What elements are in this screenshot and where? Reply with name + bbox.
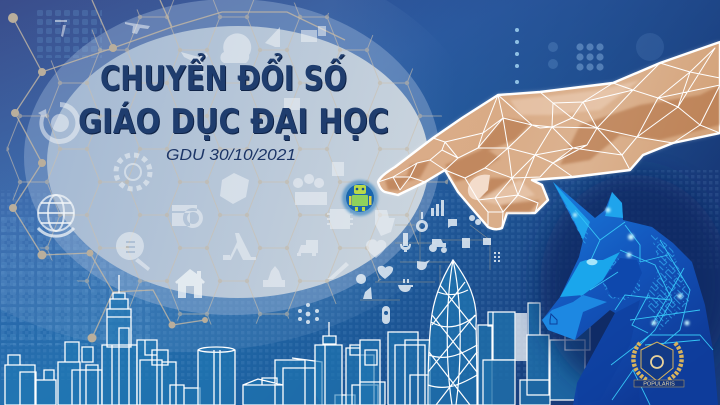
unicorn nostril [550, 314, 557, 324]
icon: coin stack [382, 306, 390, 324]
icon: heart pulse [366, 239, 386, 258]
hex lines: lower right network [360, 210, 490, 300]
unicorn face highlight [560, 252, 620, 297]
icon: small charts [284, 98, 344, 176]
icon: house [175, 269, 205, 298]
icons: technology symbols [38, 20, 395, 298]
shadow behind unicorn [540, 175, 720, 395]
icon: chip [327, 209, 353, 229]
hand back highlight [478, 80, 640, 205]
hand silhouette [378, 42, 720, 229]
icons: lower right small symbols [298, 200, 500, 324]
icon: tractor [429, 239, 447, 253]
center blocks [243, 358, 355, 405]
logo name: POPULARIS [643, 382, 675, 388]
icon: paper plane [265, 27, 280, 47]
icon: bird [417, 260, 430, 270]
unicorn cheek panel [603, 258, 642, 297]
logo shield [641, 342, 673, 381]
icon: robot badge [342, 180, 378, 216]
left city blocks [5, 342, 102, 405]
icon: app store [223, 233, 256, 260]
logo banner [634, 380, 684, 387]
icon: paw [469, 215, 481, 225]
subtitle: date: GDU 30/10/2021 [166, 147, 296, 164]
unicorn silhouette [542, 182, 718, 405]
icon: cloud and sun [220, 33, 251, 63]
icon: message box [483, 238, 491, 245]
hand shading [385, 80, 720, 212]
midtown blocks [137, 340, 200, 405]
icon: chat [448, 219, 457, 228]
icon: camera [301, 26, 326, 42]
unicorn dark neck panels [577, 300, 718, 405]
icon: magnifier [116, 232, 150, 271]
oval panel: outer translucent ring [0, 0, 485, 352]
icon: weight [263, 266, 285, 287]
icon: dollar coin [416, 212, 428, 232]
title: CHUYỂN ĐỔI SỐ [100, 52, 347, 99]
icon: money box [172, 205, 203, 228]
thumb nail highlight [468, 175, 490, 200]
hand with polygon mesh [378, 42, 720, 229]
icon: network node star [298, 303, 319, 324]
icon: bar chart [431, 200, 444, 216]
round tower [198, 347, 235, 405]
hand mesh lines [378, 48, 720, 228]
icon: box [220, 173, 249, 204]
network lattice [6, 0, 448, 342]
cityscape [5, 275, 430, 405]
hand glow [378, 42, 720, 228]
unicorn light sparks [573, 208, 690, 326]
unicorn eye [586, 259, 598, 265]
icon: truck [297, 240, 318, 256]
icon: coffee cup [398, 279, 413, 292]
unicorn head [542, 182, 718, 405]
icon: people [293, 174, 327, 205]
unicorn muzzle [542, 295, 607, 340]
icon: microphone [400, 233, 411, 252]
icon: hearts [378, 266, 393, 279]
unicorn horn and ear glow [553, 182, 623, 240]
blocks before gherkin [360, 332, 430, 405]
icon: tools [327, 262, 349, 279]
empire state tower [102, 275, 137, 405]
icon: globe [38, 195, 74, 236]
icon: drone [55, 20, 150, 37]
icon: tree head [356, 274, 372, 299]
title [78, 52, 389, 142]
logo laurel [633, 343, 682, 380]
gherkin tower [428, 260, 477, 405]
right city blocks [478, 303, 590, 405]
icon: dollar cycle [38, 102, 81, 144]
icon: gear bulb [116, 155, 150, 189]
icon: document [462, 238, 470, 248]
logo rosette [651, 356, 663, 368]
unicorn maze circuitry [565, 205, 690, 330]
title: GIÁO DỤC ĐẠI HỌC [78, 101, 389, 142]
oval panel: inner light ellipse [47, 26, 429, 298]
unicorn circuit lines [575, 210, 713, 405]
icon: gesture hand [375, 210, 395, 236]
right tower [315, 322, 378, 405]
oval panel: middle ring [24, 0, 440, 315]
logo: popularis emblem [633, 342, 684, 388]
icon: plane [181, 52, 208, 74]
icon: grid [494, 252, 500, 262]
